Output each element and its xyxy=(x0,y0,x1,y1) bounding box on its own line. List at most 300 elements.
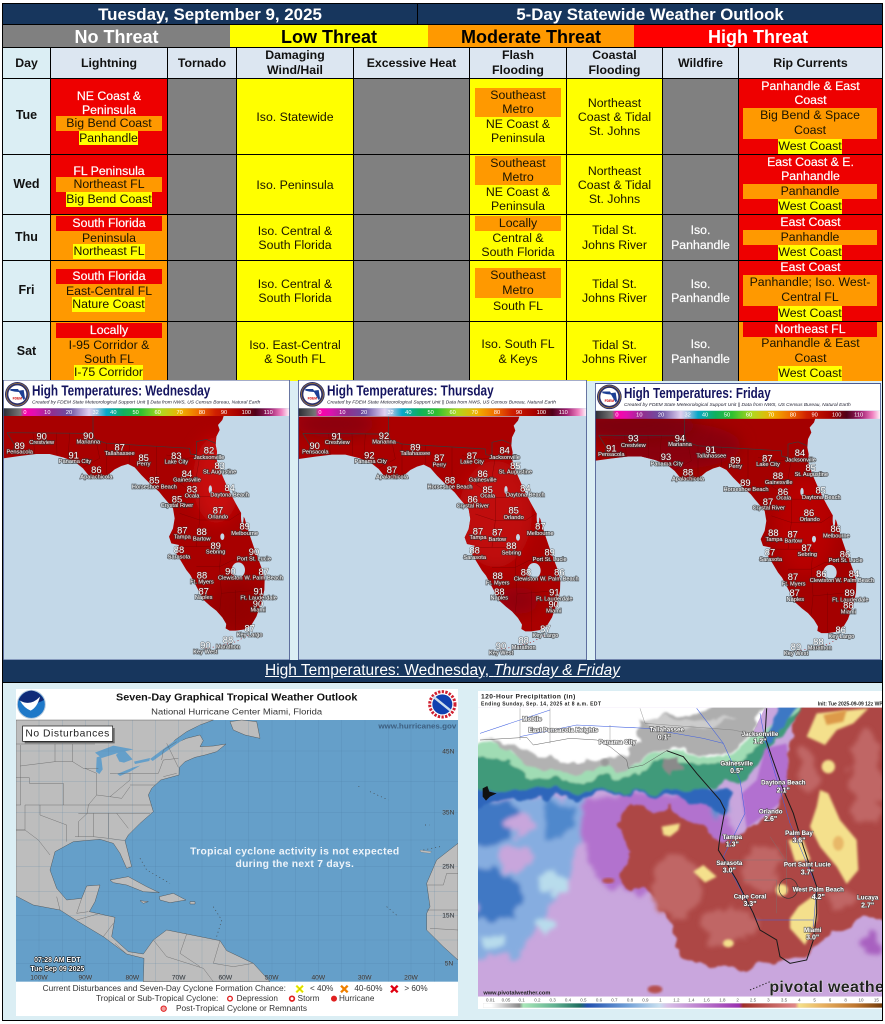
city temperature labels: Marianna xyxy=(372,440,397,446)
city temperature labels: 87 xyxy=(213,506,223,516)
city temperature labels: 83 xyxy=(187,484,197,494)
city temperature labels: Pensacola xyxy=(6,450,34,456)
city temperature labels: Sarasota xyxy=(168,554,191,560)
precipitation color scale xyxy=(483,997,883,1008)
precipitation color scale: 4 xyxy=(798,997,801,1002)
city temperature labels: 88 xyxy=(469,546,480,556)
icon: NOAA logo xyxy=(17,690,45,718)
city temperature labels: 87 xyxy=(387,465,397,475)
header: damaging wind and hail: Wind/Hail xyxy=(267,62,323,76)
city temperature labels: 86 xyxy=(804,508,814,518)
rip currents Thu: Panhandle xyxy=(781,230,839,244)
rip currents Thu: East Coast xyxy=(780,215,841,229)
wildfire Fri: Panhandle xyxy=(671,290,730,304)
header: rip currents xyxy=(739,48,882,78)
city temperature labels: Crestview xyxy=(621,443,647,449)
city temperature labels: Crystal River xyxy=(161,503,193,509)
city temperature labels: Clewiston xyxy=(514,576,538,582)
city temperature labels: 86 xyxy=(830,524,841,534)
city temperature labels: Clewiston xyxy=(218,576,243,582)
city temperature labels: Crestview xyxy=(325,440,351,446)
city precipitation labels: 1.3" xyxy=(726,842,739,849)
city temperature labels: Clewiston xyxy=(810,578,834,584)
city precipitation labels: Miami xyxy=(804,927,822,934)
flash flooding Fri xyxy=(470,261,566,321)
lightning Thu: Northeast FL xyxy=(73,244,145,258)
city temperature labels: 88 xyxy=(843,600,854,610)
wind Thu xyxy=(237,215,353,260)
city temperature labels: Pensacola xyxy=(302,450,329,456)
city temperature labels: Miami xyxy=(250,608,266,614)
city precipitation labels: Jacksonville xyxy=(742,731,779,738)
flash flooding Sat xyxy=(470,322,566,381)
city temperature labels: 87 xyxy=(801,543,812,553)
city temperature labels: W. Palm Beach xyxy=(244,576,283,582)
title xyxy=(116,693,358,716)
city temperature labels: Jacksonville xyxy=(489,455,520,461)
wind Fri xyxy=(237,261,353,321)
header: wildfire xyxy=(663,48,738,78)
city temperature labels: 91 xyxy=(606,444,617,454)
city temperature labels: 87 xyxy=(473,526,483,536)
city temperature labels: Ft. Lauderdale xyxy=(240,596,277,602)
title bar: outlook name xyxy=(418,4,882,24)
header: flash flooding xyxy=(470,48,566,78)
city temperature labels: Marathon xyxy=(216,644,240,650)
coastal flooding Wed xyxy=(567,155,662,214)
legend: < 40% xyxy=(310,984,333,993)
city temperature labels: Port St. Lucie xyxy=(829,558,863,564)
website: www.hurricanes.gov xyxy=(377,724,456,731)
coastline xyxy=(480,737,667,768)
precipitation color scale: 0.4 xyxy=(565,997,572,1002)
city temperature labels: Tampa xyxy=(174,534,192,540)
rip currents Fri xyxy=(739,261,882,321)
color scale bar: 40 xyxy=(405,410,411,416)
coastal flooding Tue: St. Johns xyxy=(589,124,640,138)
latitude and longitude labels: 70W xyxy=(172,974,186,981)
precipitation color scale: 10 xyxy=(858,997,864,1002)
lightning Tue xyxy=(51,79,167,154)
no disturbances box xyxy=(23,726,115,743)
coastal flooding Tue xyxy=(567,79,662,154)
header: coastal flooding xyxy=(567,48,662,78)
color scale bar: 32 xyxy=(685,412,691,418)
latitude and longitude labels: 90W xyxy=(78,974,93,981)
coastal flooding Wed: Northeast xyxy=(588,164,641,178)
city temperature labels: 91 xyxy=(549,587,560,597)
city temperature labels: 87 xyxy=(244,623,255,633)
city temperature labels: 86 xyxy=(477,469,488,479)
no disturbances box: No Disturbances xyxy=(25,728,109,739)
scattered islands xyxy=(140,787,440,937)
coastal flooding Fri: Johns River xyxy=(582,290,647,304)
city temperature labels: 87 xyxy=(535,522,546,532)
precipitation color scale: 3.5 xyxy=(781,997,788,1002)
city temperature labels xyxy=(598,434,874,657)
icon: NWS logo xyxy=(430,692,455,717)
city temperature labels: Marathon xyxy=(808,646,832,652)
color scale bar xyxy=(595,411,881,419)
city temperature labels: 85 xyxy=(482,485,493,495)
lightning Wed: Northeast FL xyxy=(73,177,145,191)
wildfire Thu xyxy=(663,215,738,260)
city temperature labels: Apalachicola xyxy=(80,474,113,480)
brand watermark xyxy=(483,980,882,996)
bottom background xyxy=(3,683,882,1020)
city temperature labels: 87 xyxy=(114,442,125,452)
header: map title: Created by FDEM State Meteorological Support Unit || Data from NWS, US Census Bureau, Natural Earth xyxy=(327,399,556,404)
city temperature labels: Horseshoe Beach xyxy=(132,484,177,490)
coastal flooding Wed: St. Johns xyxy=(589,192,640,206)
city temperature labels: Crystal River xyxy=(456,504,489,510)
city temperature labels: 86 xyxy=(467,494,478,504)
flash flooding Thu: Locally xyxy=(499,216,537,230)
color scale bar: 10 xyxy=(44,410,50,416)
legend: Tropical or Sub-Tropical Cyclone: xyxy=(96,994,218,1003)
city temperature labels: Apalachicola xyxy=(672,476,705,482)
city temperature labels: 86 xyxy=(778,487,788,497)
city temperature labels: Perry xyxy=(137,462,151,468)
title: National Hurricane Center Miami, Florida xyxy=(151,706,322,716)
header: lightning: Lightning xyxy=(81,56,137,70)
land and temperature shading xyxy=(596,418,856,652)
flash flooding Tue: Southeast xyxy=(490,88,546,102)
city temperature labels: Jacksonville xyxy=(785,458,816,464)
header: map title: High Temperatures: Thursday xyxy=(327,383,494,400)
city temperature labels: 89 xyxy=(791,642,801,652)
city temperature labels: Marianna xyxy=(668,442,693,448)
lightning Fri: East-Central FL xyxy=(66,284,152,298)
header: flash flooding: Flash xyxy=(502,48,534,62)
header: damaging wind and hail xyxy=(237,48,353,78)
rip currents Fri: West Coast xyxy=(778,306,842,320)
city temperature labels: 90 xyxy=(548,600,559,610)
precipitation color scale: 1.2 xyxy=(673,997,680,1002)
city temperature labels: 84 xyxy=(224,483,235,493)
city precipitation labels: Port Saint Lucie xyxy=(784,862,831,869)
color scale bar: 32 xyxy=(93,410,99,416)
city temperature labels: Panama City xyxy=(59,459,91,465)
wildfire Tue xyxy=(663,79,738,154)
lightning Tue: Peninsula xyxy=(82,102,136,116)
color scale bar: 110 xyxy=(264,410,273,416)
city temperature labels: 90 xyxy=(36,432,47,442)
land masses xyxy=(16,720,458,982)
city temperature labels: Orlando xyxy=(800,517,820,523)
lightning Thu: Peninsula xyxy=(82,230,136,244)
city temperature labels xyxy=(6,431,283,656)
header: rip currents: Rip Currents xyxy=(773,56,848,70)
latitude and longitude labels: 30W xyxy=(358,974,372,981)
flash flooding Tue: Metro xyxy=(502,102,534,116)
coastal flooding Wed: Coast & Tidal xyxy=(578,178,651,192)
color scale bar: 70 xyxy=(768,412,774,418)
city temperature labels: Tallahassee xyxy=(105,451,135,457)
header: coastal flooding: Flooding xyxy=(589,62,640,76)
city precipitation labels: 3.0" xyxy=(806,935,819,942)
day label: Tue: Tue xyxy=(16,108,37,122)
precipitation color scale: 1.4 xyxy=(688,997,695,1002)
precipitation color scale: 2.5 xyxy=(750,997,757,1002)
land and temperature shading xyxy=(3,416,265,649)
city temperature labels: 93 xyxy=(628,434,639,444)
color scale bar: 0 xyxy=(318,410,322,416)
wildfire Fri: Iso. xyxy=(691,276,710,290)
city temperature labels: 88 xyxy=(773,471,783,481)
city precipitation labels: 0.1" xyxy=(658,734,671,741)
city temperature labels: Sebring xyxy=(502,550,521,556)
color scale bar: 50 xyxy=(724,412,730,418)
city precipitation labels: Panama City xyxy=(599,739,636,746)
city temperature labels: 89 xyxy=(730,456,741,466)
city temperature labels: Melbourne xyxy=(823,534,850,540)
day label: Thu xyxy=(3,215,50,260)
color scale bar: 110 xyxy=(854,412,863,418)
city temperature labels: 85 xyxy=(510,461,521,471)
lightning Sat: I-95 Corridor & xyxy=(69,338,149,352)
city temperature labels: Naples xyxy=(491,596,508,602)
city temperature labels: 87 xyxy=(540,624,551,634)
latitude and longitude labels: 15N xyxy=(442,913,455,920)
icon: FDEM seal xyxy=(300,382,325,407)
lightning Thu: South Florida xyxy=(72,216,146,230)
city temperature labels: 88 xyxy=(683,468,693,478)
lightning Wed: FL Peninsula xyxy=(73,164,145,178)
header: day xyxy=(3,48,50,78)
color scale bar: 32 xyxy=(388,410,394,416)
city temperature labels: Gainesville xyxy=(173,478,201,484)
lightning Sat: Locally xyxy=(90,323,128,337)
city temperature labels: St. Augustine xyxy=(499,470,532,476)
city temperature labels: Bartow xyxy=(193,536,211,542)
city temperature labels: Pensacola xyxy=(598,452,625,458)
wind Tue: Iso. Statewide xyxy=(256,110,334,124)
city temperature labels: Perry xyxy=(729,464,742,470)
city temperature labels: Sebring xyxy=(206,550,225,556)
outlook statement: during the next 7 days. xyxy=(236,859,354,870)
title bar: date xyxy=(3,4,417,24)
city temperature labels: 89 xyxy=(239,522,250,532)
city temperature labels: Bartow xyxy=(785,538,803,544)
map: high temperatures Wednesday xyxy=(3,380,290,660)
city temperature labels: 85 xyxy=(508,506,519,516)
city temperature labels: Apalachicola xyxy=(376,474,409,480)
city temperature labels: Ft. Myers xyxy=(486,580,510,586)
day label: Wed xyxy=(3,155,50,214)
city temperature labels: 88 xyxy=(196,527,207,537)
rip currents Thu: West Coast xyxy=(778,245,842,259)
city temperature labels: 87 xyxy=(765,548,775,558)
city precipitation labels: Tampa xyxy=(723,834,743,841)
day label: Sat xyxy=(3,322,50,381)
city temperature labels: Bartow xyxy=(489,537,507,543)
city temperature labels: 86 xyxy=(91,465,102,475)
header: flash flooding: Flooding xyxy=(492,62,544,76)
wind Tue xyxy=(237,79,353,154)
wind Sat: & South FL xyxy=(264,352,326,366)
flash flooding Tue: NE Coast & xyxy=(486,116,550,130)
city temperature labels: Horseshoe Beach xyxy=(724,487,768,493)
legend: Depression xyxy=(237,994,278,1003)
great lakes xyxy=(95,725,202,776)
day label: Tue xyxy=(3,79,50,154)
color scale bar: 60 xyxy=(450,410,456,416)
city precipitation labels: 3.0" xyxy=(723,868,736,875)
wind Wed: Iso. Peninsula xyxy=(256,178,334,192)
city temperature labels: Naples xyxy=(195,595,213,601)
coastal flooding Thu: Johns River xyxy=(582,238,647,252)
excessive heat column: no threat xyxy=(354,79,469,380)
day label: Wed: Wed xyxy=(13,177,40,191)
city temperature labels: 89 xyxy=(544,548,555,558)
city temperature labels: 87 xyxy=(198,586,209,596)
city temperature labels: 88 xyxy=(813,637,824,647)
wind Thu: South Florida xyxy=(258,238,332,252)
wildfire Fri xyxy=(663,261,738,321)
rip currents Tue: West Coast xyxy=(778,138,842,152)
city temperature labels: Gainesville xyxy=(765,480,793,486)
header: tornado xyxy=(168,48,236,78)
timestamp: Tue Sep 09 2025 xyxy=(30,966,84,973)
city temperature labels: 88 xyxy=(521,567,531,577)
city temperature labels: 84 xyxy=(520,484,531,494)
city temperature labels: Crystal River xyxy=(752,506,785,512)
rip currents Fri: Central FL xyxy=(781,290,839,304)
title bar: date: Tuesday, September 9, 2025 xyxy=(98,5,322,24)
map: high temperatures Friday xyxy=(595,383,881,660)
brand watermark: www.pivotalweather.com xyxy=(482,991,550,997)
color scale bar: 40 xyxy=(702,412,708,418)
city temperature labels: 87 xyxy=(492,528,503,538)
city temperature labels: 90 xyxy=(309,441,320,451)
city temperature labels: Tallahassee xyxy=(696,454,726,460)
color scale bar: 20 xyxy=(66,410,72,416)
precipitation color scale: 5 xyxy=(813,997,816,1002)
city temperature labels: 91 xyxy=(253,587,264,597)
city temperature labels: Daytona Beach xyxy=(802,495,841,501)
header: lightning xyxy=(51,48,167,78)
wind Sat: Iso. East-Central xyxy=(249,338,341,352)
city temperature labels: Sarasota xyxy=(463,555,487,561)
city temperature labels: Jacksonville xyxy=(194,455,224,461)
header: map title: Created by FDEM State Meteorological Support Unit || Data from NWS, US Census Bureau, Natural Earth xyxy=(624,402,851,407)
city temperature labels: 88 xyxy=(492,571,503,581)
day label: Thu: Thu xyxy=(15,230,38,244)
legend: Post-Tropical Cyclone or Remnants xyxy=(176,1004,307,1013)
wildfire Thu: Panhandle xyxy=(671,238,730,252)
precipitation color scale: 0.05 xyxy=(502,997,511,1002)
city temperature labels: 88 xyxy=(223,635,233,645)
legend: no threat xyxy=(3,25,230,47)
legend: 40-60% xyxy=(354,984,382,993)
rip currents Sat xyxy=(739,322,882,381)
city temperature labels: Marianna xyxy=(77,440,101,446)
precipitation color scale: 0.9 xyxy=(642,997,649,1002)
ocean xyxy=(16,720,458,982)
city temperature labels: Gainesville xyxy=(469,478,497,484)
precipitation color scale: 15 xyxy=(874,997,879,1002)
panel: NHC tropical weather outlook xyxy=(16,689,458,1016)
flash flooding Sat: & Keys xyxy=(499,352,537,366)
timestamp xyxy=(30,957,84,973)
city temperature labels: 88 xyxy=(518,636,529,646)
city temperature labels: Panama City xyxy=(650,462,683,468)
chart header: Init: Tue 2025-09-09 12z WP xyxy=(818,702,882,708)
city temperature labels: Orlando xyxy=(208,514,228,520)
lightning Sat: I-75 Corridor xyxy=(74,365,143,379)
color scale bar: 80 xyxy=(199,410,205,416)
lightning Sat xyxy=(51,322,167,381)
flash flooding Sat: Iso. South FL xyxy=(481,336,555,350)
tornado column: no threat xyxy=(168,79,236,380)
city temperature labels: Daytona Beach xyxy=(506,492,545,498)
precipitation color scale: 1 xyxy=(659,997,662,1002)
precipitation color scale: 8 xyxy=(844,997,847,1002)
city temperature labels: 85 xyxy=(172,494,182,504)
header: coastal flooding: Coastal xyxy=(592,48,637,62)
precipitation color scale: 3 xyxy=(767,997,770,1002)
icon: FDEM seal xyxy=(597,384,622,409)
city temperature labels: 82 xyxy=(204,446,214,456)
precipitation color scale: 0.5 xyxy=(580,997,587,1002)
city temperature labels: 87 xyxy=(788,572,798,582)
city temperature labels: 87 xyxy=(467,451,477,461)
wind Sat xyxy=(237,322,353,381)
lightning Tue: NE Coast & xyxy=(77,88,141,102)
chart header xyxy=(481,694,883,708)
city temperature labels: 87 xyxy=(789,588,800,598)
chart header: Ending Sunday, Sep. 14, 2025 at 8 a.m. EDT xyxy=(481,702,601,708)
city precipitation labels: 3.7" xyxy=(801,869,814,876)
lightning Sat: South FL xyxy=(84,352,134,366)
rip currents Tue: Coast xyxy=(794,123,826,137)
city temperature labels: 88 xyxy=(494,587,505,597)
panel: pivotal weather 120-hour precipitation xyxy=(478,691,882,1009)
city temperature labels: 84 xyxy=(795,448,805,458)
color scale bar: 0 xyxy=(615,412,619,418)
city temperature labels: 83 xyxy=(214,461,225,471)
outlook statement xyxy=(190,847,399,870)
city precipitation labels: 3.6" xyxy=(792,838,806,845)
header: excessive heat xyxy=(354,48,469,78)
city temperature labels: Tampa xyxy=(766,537,783,543)
city temperature labels: St. Augustine xyxy=(203,470,236,476)
latitude and longitude labels: 100W xyxy=(30,974,48,981)
city temperature labels: 88 xyxy=(445,476,455,486)
city temperature labels: Miami xyxy=(546,608,561,614)
city precipitation labels: Orlando xyxy=(759,808,783,815)
city temperature labels xyxy=(302,431,579,656)
wildfire Thu: Iso. xyxy=(691,222,710,236)
header: tornado: Tornado xyxy=(178,56,226,70)
precipitation color scale: 0.1 xyxy=(519,997,525,1002)
city temperature labels: 91 xyxy=(705,445,716,455)
city temperature labels: Ft. Lauderdale xyxy=(536,596,573,602)
city temperature labels: Ocala xyxy=(480,494,496,500)
flash flooding Tue xyxy=(470,79,566,154)
city temperature labels: 88 xyxy=(197,570,207,580)
wind Fri: Iso. Central & xyxy=(258,276,332,290)
color scale bar: 100 xyxy=(537,410,546,416)
city precipitation labels: Mobile xyxy=(522,716,542,723)
city temperature labels: 86 xyxy=(816,569,827,579)
city precipitation labels: 2.6" xyxy=(764,816,777,823)
latitude and longitude labels: 35N xyxy=(442,809,455,816)
city precipitation labels: 2.7" xyxy=(861,902,874,909)
color scale bar: 10 xyxy=(339,410,345,416)
color scale bar xyxy=(298,408,587,416)
